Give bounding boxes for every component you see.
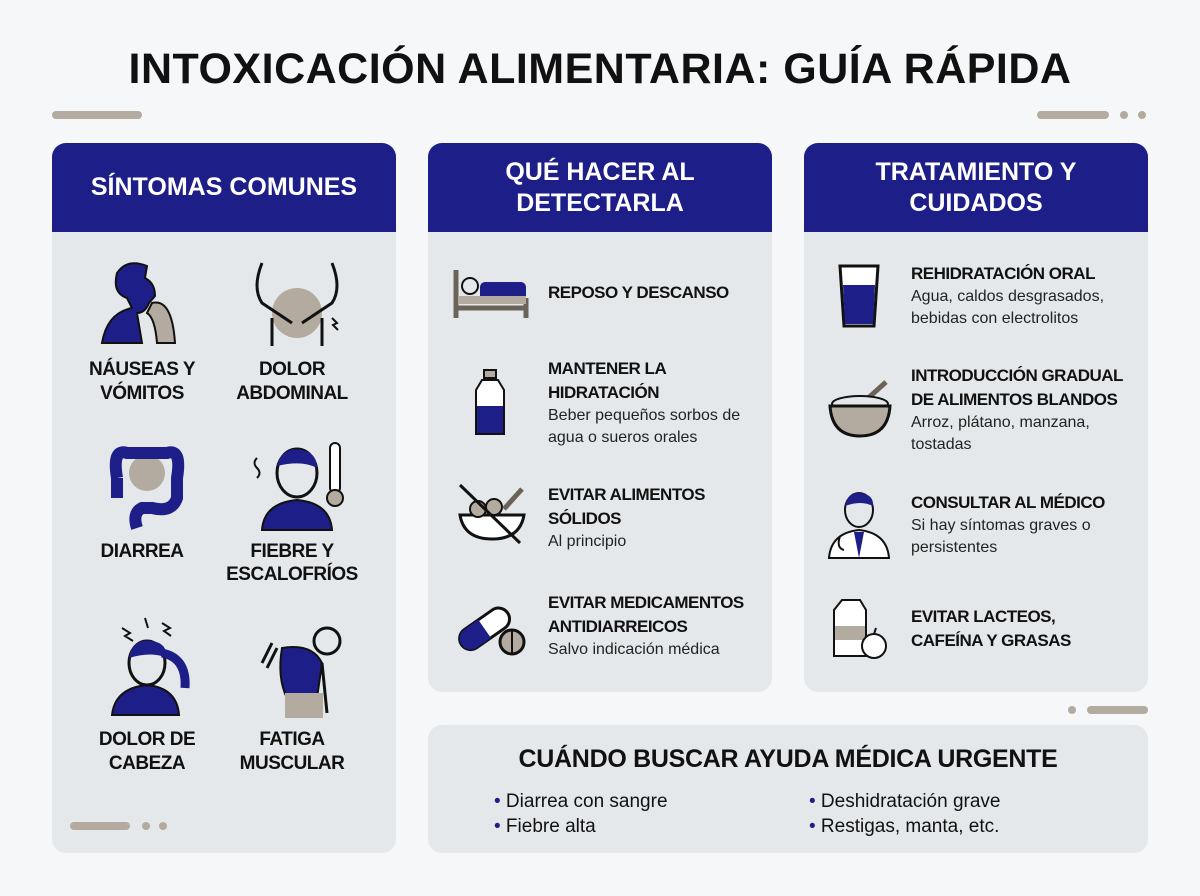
- list left: • Fiebre alta: [494, 816, 596, 837]
- icon: no comida: [458, 484, 526, 544]
- item: evitar antidiarreicos: EVITAR MEDICAMENTOS ANTIDIARREICOS: [548, 593, 744, 636]
- heading: qué hacer: QUÉ HACER AL: [505, 158, 695, 186]
- item: consultar médico: Si hay síntomas graves o persistentes: [911, 517, 1091, 556]
- item: hidratación: Beber pequeños sorbos de agua o sueros orales: [548, 407, 740, 446]
- list right: [809, 791, 1000, 837]
- panel: qué hacer: [428, 143, 772, 692]
- label: DIARREA: [100, 541, 184, 562]
- panel: ayuda urgente: [428, 725, 1148, 853]
- icon: dolor abdominal: [256, 262, 339, 346]
- item: introducción gradual: Arroz, plátano, manzana, tostadas: [911, 414, 1090, 453]
- item: introducción gradual: INTRODUCCIÓN GRADUAL DE ALIMENTOS BLANDOS: [911, 366, 1123, 409]
- icon: cuenco: [828, 380, 892, 438]
- item: evitar sólidos: [548, 485, 705, 550]
- item: evitar lácteos: [911, 607, 1071, 650]
- icon: cama: [454, 270, 528, 318]
- title: INTOXICACIÓN ALIMENTARIA: GUÍA RÁPIDA: [128, 45, 1071, 93]
- item: rehidratación: [911, 264, 1104, 327]
- item: evitar sólidos: EVITAR ALIMENTOS SÓLIDOS: [548, 485, 705, 528]
- heading: qué hacer: [428, 143, 772, 232]
- icon: vaso: [838, 264, 880, 328]
- label: NÁUSEAS Y VÓMITOS: [89, 359, 195, 404]
- item: evitar antidiarreicos: [548, 593, 744, 658]
- item: introducción gradual: [911, 366, 1123, 453]
- heading: qué hacer: DETECTARLA: [516, 188, 684, 216]
- heading: síntomas: SÍNTOMAS COMUNES: [91, 173, 357, 201]
- heading: ayuda urgente: CUÁNDO BUSCAR AYUDA MÉDICA URGENTE: [519, 745, 1057, 773]
- list left: • Diarrea con sangre: [494, 791, 668, 812]
- item: evitar lácteos: EVITAR LACTEOS,: [911, 607, 1055, 626]
- icon: leche y manzana: [833, 599, 887, 659]
- panel: tratamiento: [804, 143, 1148, 692]
- item: evitar lácteos: CAFEÍNA Y GRASAS: [911, 631, 1071, 650]
- icon: nausea: [100, 262, 176, 344]
- label: FATIGA MUSCULAR: [240, 729, 344, 774]
- icon: fatiga: [260, 626, 342, 718]
- item: rehidratación: Agua, caldos desgrasados, bebidas con electrolitos: [911, 288, 1104, 327]
- item: evitar antidiarreicos: Salvo indicación médica: [548, 641, 720, 658]
- panel: síntomas comunes: [52, 143, 396, 853]
- icon: botella: [475, 369, 505, 435]
- heading: tratamiento: [804, 143, 1148, 232]
- heading: tratamiento: CUIDADOS: [909, 188, 1043, 216]
- icon: dolor cabeza: [110, 618, 190, 716]
- icon: pastillas: [458, 606, 526, 656]
- item: hidratación: MANTENER LA HIDRATACIÓN: [548, 359, 666, 402]
- label: DOLOR ABDOMINAL: [236, 359, 348, 404]
- item: reposo: REPOSO Y DESCANSO: [548, 283, 729, 302]
- label: DOLOR DE CABEZA: [99, 729, 195, 774]
- heading: síntomas: [52, 143, 396, 232]
- item: consultar médico: CONSULTAR AL MÉDICO: [911, 493, 1105, 512]
- list right: • Deshidratación grave: [809, 791, 1000, 812]
- icon: fiebre: [254, 442, 344, 531]
- icon: médico: [828, 492, 890, 559]
- item: evitar sólidos: Al principio: [548, 533, 626, 550]
- item: consultar médico: [911, 493, 1105, 556]
- item: hidratación: [548, 359, 740, 446]
- list right: • Restigas, manta, etc.: [809, 816, 999, 837]
- list left: [494, 791, 668, 837]
- icon: diarrea: [110, 446, 184, 530]
- label: FIEBRE Y ESCALOFRÍOS: [226, 541, 358, 585]
- heading: tratamiento: TRATAMIENTO Y: [876, 158, 1076, 186]
- item: rehidratación: REHIDRATACIÓN ORAL: [911, 264, 1095, 283]
